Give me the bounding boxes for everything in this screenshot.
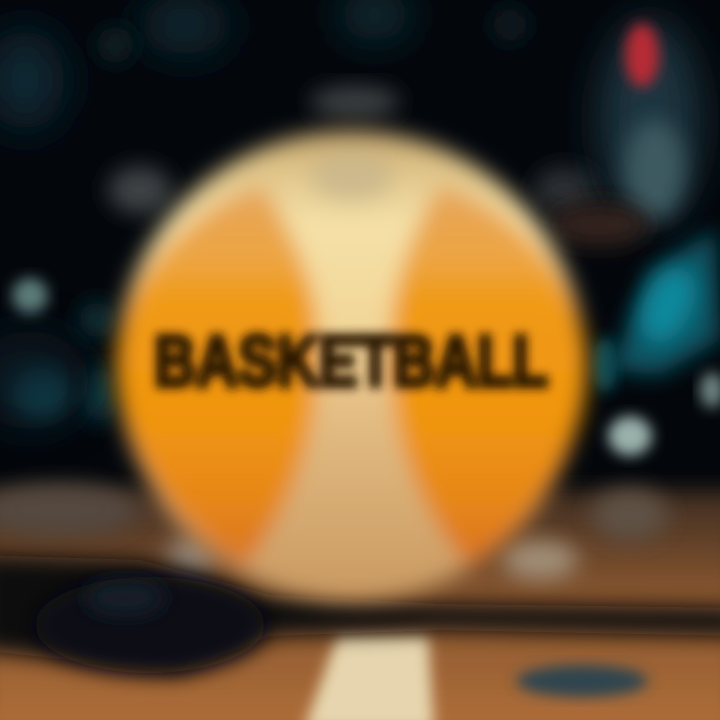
background player figure (550, 20, 720, 393)
floor badge (516, 665, 648, 697)
basketball (116, 130, 587, 600)
ball top highlight (310, 154, 394, 202)
ball right orange panel (390, 186, 587, 566)
floor shadow band (0, 555, 720, 673)
court floor (0, 484, 720, 720)
court white line (304, 634, 434, 720)
ball cream base (117, 130, 585, 600)
ball left orange panel (116, 186, 318, 566)
ball title text: BASKETBALL (154, 322, 548, 402)
background bokeh lights (0, 0, 720, 456)
